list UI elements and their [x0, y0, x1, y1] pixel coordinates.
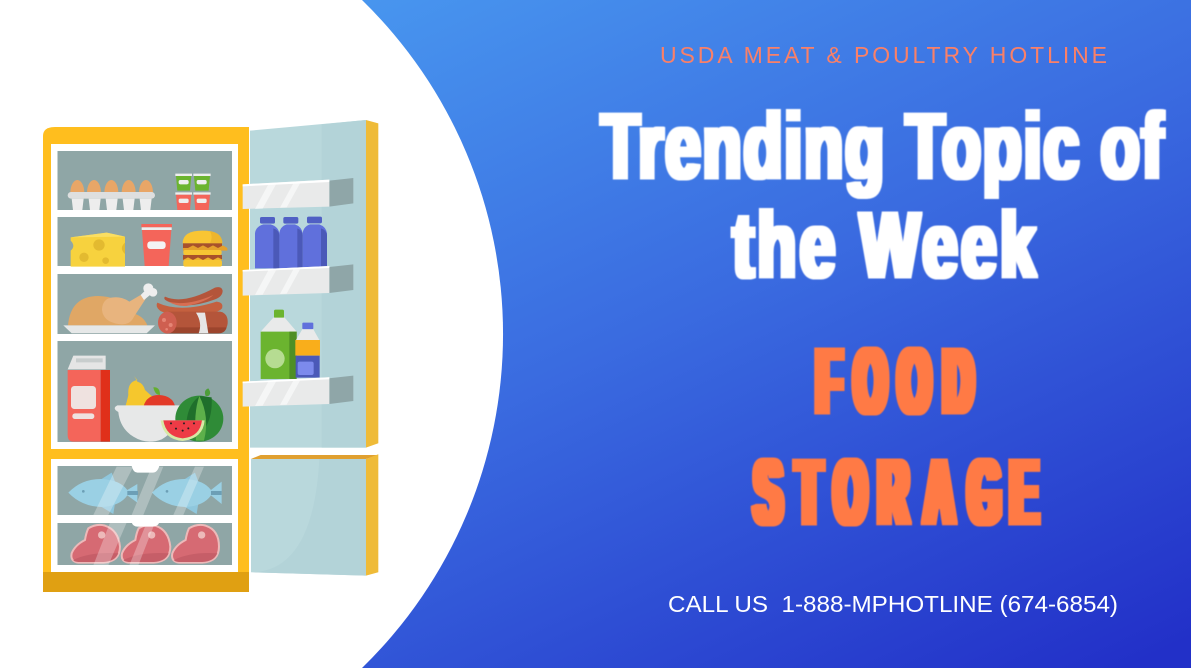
door items: green jug and juice bottle: [261, 310, 320, 379]
food: red cup: [141, 224, 172, 266]
food: raw steaks: [71, 525, 219, 563]
food: eggs in carton: [68, 180, 155, 210]
food: yogurt cups: [175, 174, 211, 210]
door shelf: middle: [243, 264, 353, 296]
food: fruit bowl: [115, 376, 181, 442]
food: frozen fish: [68, 473, 222, 514]
food: milk carton: [68, 356, 110, 442]
call to action phone number: CALL US 1-888-MPHOTLINE (674-6854): [668, 591, 1118, 617]
door shelf: top: [243, 178, 353, 209]
topic heading: [755, 330, 1038, 545]
door items: blue water bottles: [255, 217, 327, 268]
title line 1: Trending Topic of: [601, 94, 1163, 198]
food: cheese: [71, 233, 125, 267]
illustration: open refrigerator: [43, 120, 378, 592]
title: [601, 94, 1163, 297]
freezer drawers: glass fronts: [93, 466, 204, 565]
food: roast chicken on plate: [63, 283, 157, 333]
food: burger: [183, 231, 227, 267]
topic line 2: STORAGE: [755, 441, 1038, 545]
food: watermelon: [161, 388, 223, 442]
fridge body: [43, 127, 249, 592]
eyebrow: hotline name: USDA MEAT & POULTRY HOTLINE: [660, 42, 1107, 68]
food: sausages: [157, 287, 228, 334]
topic line 1: FOOD: [817, 330, 973, 434]
title line 2: the Week: [733, 193, 1036, 297]
lower door: [251, 454, 378, 576]
white circle panel: [0, 0, 503, 668]
upper door: [250, 120, 378, 448]
door shelf: bottom: [243, 376, 353, 407]
